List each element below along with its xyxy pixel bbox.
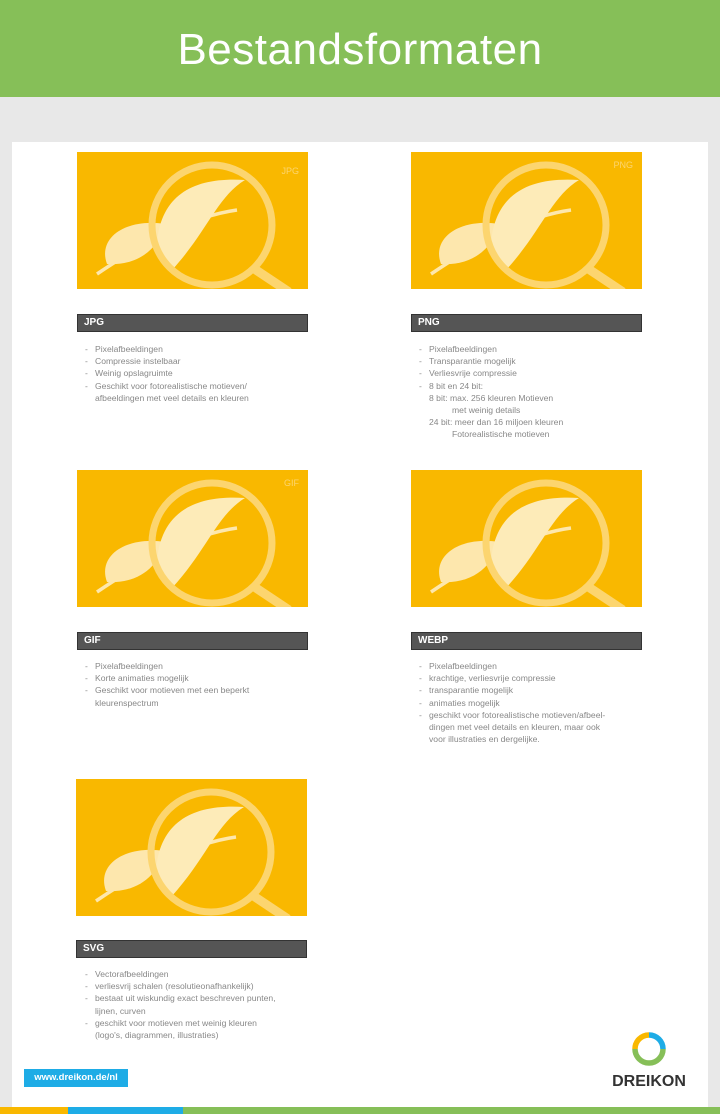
card image: PNG: PNG (613, 160, 633, 170)
url badge (24, 1069, 128, 1087)
heading: GIF (77, 632, 308, 650)
heading: WEBP (411, 632, 642, 650)
card image: JPG (77, 152, 308, 289)
heading: JPG (77, 314, 308, 332)
text: GIF list: kleurenspectrum (95, 698, 159, 708)
text: JPG list: Geschikt voor fotorealistische motieven/ (95, 381, 247, 391)
heading: JPG: JPG (84, 317, 104, 328)
heading: SVG (76, 940, 307, 958)
text: SVG list: geschikt voor motieven met weinig kleuren (95, 1018, 257, 1028)
text: PNG list: 8 bit: max. 256 kleuren Motieven (429, 393, 553, 403)
text: SVG list: bestaat uit wiskundig exact beschreven punten, (95, 993, 276, 1003)
card image: SVG (76, 779, 307, 916)
text: PNG list: Fotorealistische motieven (452, 429, 549, 439)
text: JPG list: Weinig opslagruimte (95, 368, 173, 378)
text: JPG list (85, 344, 249, 403)
card image: GIF: GIF (284, 478, 300, 488)
text: SVG list: (logo's, diagrammen, illustraties) (95, 1030, 218, 1040)
bottom color stripe (0, 1107, 720, 1114)
text: PNG list (419, 344, 563, 439)
text: PNG list: Verliesvrije compressie (429, 368, 517, 378)
logo: Dreikon (612, 1032, 686, 1089)
text: JPG list: Pixelafbeeldingen (95, 344, 163, 354)
text: WEBP list: voor illustraties en dergelijke. (429, 734, 540, 744)
text: PNG list: Transparantie mogelijk (429, 356, 516, 366)
heading: GIF: GIF (84, 635, 101, 646)
card image: WEBP (411, 470, 642, 607)
text: GIF list (85, 661, 250, 708)
text: WEBP list (419, 661, 605, 744)
text: PNG list: 8 bit en 24 bit: (429, 381, 483, 391)
text: SVG list (85, 969, 276, 1040)
text: SVG list: verliesvrij schalen (resolutieonafhankelijk) (95, 981, 254, 991)
text: JPG list: Compressie instelbaar (95, 356, 180, 366)
text: PNG list: 24 bit: meer dan 16 miljoen kleuren (429, 417, 563, 427)
heading: WEBP: WEBP (418, 635, 448, 646)
heading: PNG: PNG (418, 317, 440, 328)
title (0, 0, 720, 97)
text: WEBP list: geschikt voor fotorealistische motieven/afbeel- (429, 710, 605, 720)
text: GIF list: Korte animaties mogelijk (95, 673, 189, 683)
text: JPG list: afbeeldingen met veel details en kleuren (95, 393, 249, 403)
card image: JPG: JPG (281, 166, 299, 176)
text: SVG list: lijnen, curven (95, 1006, 146, 1016)
text: PNG list: Pixelafbeeldingen (429, 344, 497, 354)
text: WEBP list: animaties mogelijk (429, 698, 500, 708)
text: SVG list: Vectorafbeeldingen (95, 969, 169, 979)
heading: PNG (411, 314, 642, 332)
text: WEBP list: dingen met veel details en kleuren, maar ook (429, 722, 600, 732)
heading: SVG: SVG (83, 943, 104, 954)
text: GIF list: Geschikt voor motieven met een beperkt (95, 685, 249, 695)
title: Bestandsformaten (177, 25, 543, 74)
card image: GIF (77, 470, 308, 607)
text: PNG list: met weinig details (452, 405, 520, 415)
text: WEBP list: krachtige, verliesvrije compressie (429, 673, 556, 683)
url badge: www.dreikon.de/nl (34, 1072, 118, 1083)
text: WEBP list: Pixelafbeeldingen (429, 661, 497, 671)
card image: PNG (411, 152, 642, 289)
text: GIF list: Pixelafbeeldingen (95, 661, 163, 671)
text: WEBP list: transparantie mogelijk (429, 685, 513, 695)
